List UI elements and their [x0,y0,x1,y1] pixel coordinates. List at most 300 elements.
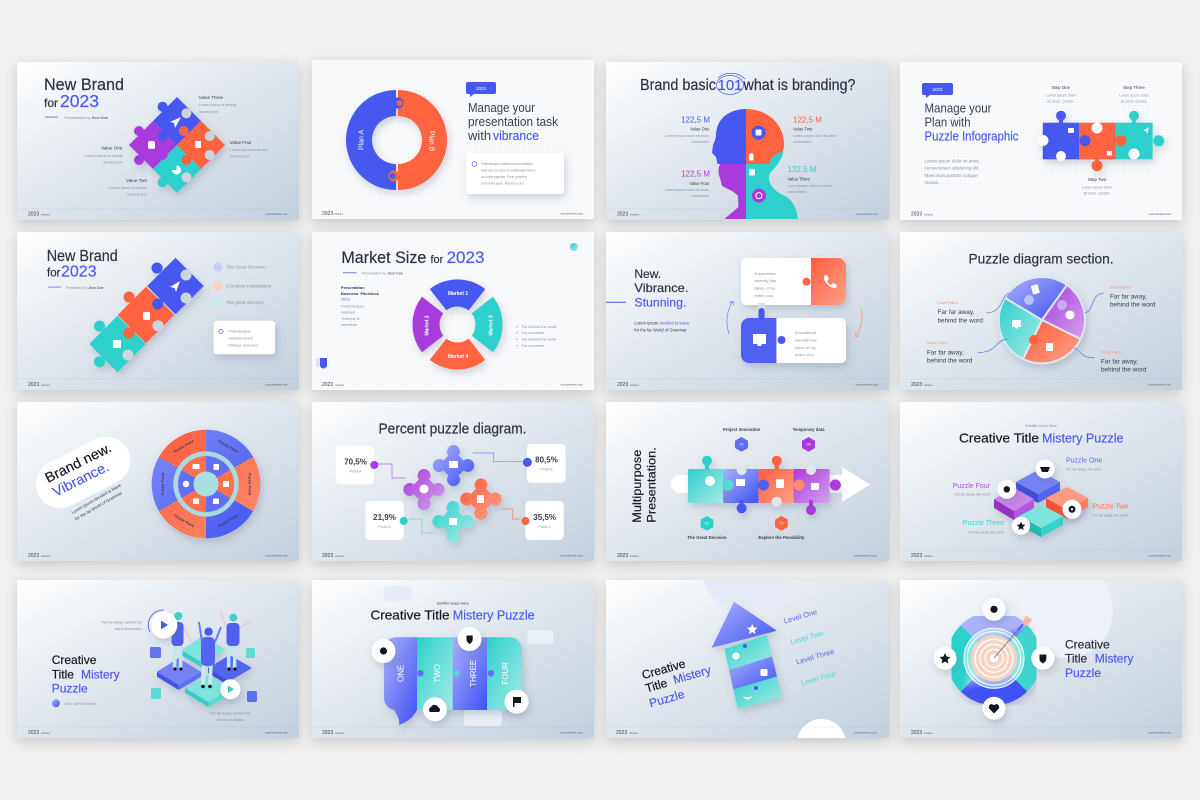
slide 12 puzzle labels: For far away, the word [1092,514,1128,518]
slide 11 vertical title: Presentation. [644,447,658,523]
slide 4 body text: Maecenas porttitor congue [924,173,978,178]
slide 6 market ring [426,293,489,356]
slide 16 dart [994,615,1032,658]
slide 6 left text: 2023 [341,296,350,302]
slide 1 value labels: Lorem Ipsum is simply [230,148,267,152]
slide 11 numbered hexagons [701,437,815,531]
slide 7: new vibrance stunning [606,232,889,390]
slide 6 market labels: Market 2 [424,315,430,336]
slide 7 heading [634,267,688,310]
slide 8 footer [900,379,1182,388]
slide 5 footer: 2023 [28,382,39,388]
slide 7 body text [634,320,690,332]
slide 6 footer [322,382,583,388]
slide 6 background [312,232,594,390]
slide 2 footer: yourwebsite.com [560,212,583,216]
slide 8 title: Puzzle diagram section. [968,250,1114,266]
slide 8 point labels: Puzzle Point D [1101,350,1123,354]
slide 10 footer: yourwebsite.com [560,554,583,558]
slide 13 start label: Let's Get's Started [64,702,95,706]
slide 5 text card [214,321,275,354]
slide 1: new brand diamond puzzle [17,62,299,220]
slide 7 bottom card text: taken of my [795,345,816,350]
slide 9 wheel labels: Puzzle Point [173,439,195,454]
slide 13 isometric platforms [157,636,252,707]
slide 16: target puzzle [900,564,1182,738]
slide 11 labels: Project Innovation [723,427,761,432]
slide 4 step labels [1046,85,1150,196]
slide 12 footer: vibrance [924,555,934,558]
slide 4 step labels: sit amet. Quisint. [1121,100,1147,104]
slide 12 footer: yourwebsite.com [1148,554,1171,558]
slide 2 text card: nonummy pede. Mauris et orci. [481,182,525,186]
slide 5 text card: habitant morbi [228,336,253,340]
slide 7 footer: vibrance [630,384,640,387]
slide 14 title: Mistery Puzzle [453,608,535,622]
slide 2 text card: Pellentesque habitant morbi tristique [481,162,533,166]
slide 2 plan labels: Plan A [358,130,366,150]
slide 2 heading [467,100,558,143]
slide 2 heading: vibrance [493,128,539,143]
slide 7 footer: yourwebsite.com [855,382,878,386]
slide 11: multipurpose arrow puzzle [606,402,889,561]
slide 14 speech bubble puzzle [384,637,522,725]
slide 5 title: New Brand [47,248,118,265]
slide 13 heading: Title [52,667,74,681]
slide 8 point labels: Puzzle Point C [927,341,949,345]
slide 4 step labels: Step Three [1123,85,1145,90]
slide 4 footer [911,212,1171,218]
slide 8 point labels: Far far away, [1110,294,1147,300]
slide 16 round icon badges [934,598,1054,720]
slide 4 body text: Lorem ipsum dolor sit amet, [924,158,980,164]
arrow: blue curved [727,301,734,334]
slide 3 footer: vibrance [630,214,640,216]
slide 12 puzzle labels: For far away, the word [969,530,1004,534]
slide 15 tilted arrow puzzle [712,602,782,709]
slide 12 title: Mistery Puzzle [1042,430,1124,446]
slide 16 footer [900,727,1182,736]
slide 14 section labels: FOUR [501,662,510,685]
slide 6 check list: For countries [522,330,544,335]
slide 3 footer: yourwebsite.com [855,212,878,216]
slide 9 wheel labels [161,439,251,529]
slide 14 section labels: ONE [396,665,406,682]
slide 9 wheel labels: Puzzle Point [218,439,240,454]
slide 10 title: Percent puzzle diagram. [378,422,526,438]
slide 13 top caption [102,620,142,631]
slide 12 puzzle labels: Puzzle Three [963,520,1004,527]
slide 6 left text: Presentation [341,285,365,290]
slide 12 puzzle labels: For far away, the word [1066,468,1101,472]
slide 13 heading: Puzzle [52,682,88,696]
slide 14 title [370,608,535,622]
slide 6 decorative blue shape [316,358,327,369]
slide 13 heading: Creative [52,653,97,667]
slide 6 title: Market Size [341,248,426,267]
slide 10 footer: 2023 [322,553,333,559]
slide 3 value labels: Value One [690,126,710,132]
slide 13 bottom caption: word mountains [217,718,244,722]
slide 11 labels [687,427,825,540]
slide 3 value labels: consectetur [788,190,807,194]
slide 4 footer: yourwebsite.com [1148,212,1171,216]
slide 14 round icon badges [372,627,529,721]
slide 10: percent puzzle diagram [312,402,594,561]
slide 5 presenter line [48,286,104,290]
slide 3 title: what is branding? [743,77,856,94]
slide 15 decorative circles [703,580,846,738]
slide 13 start label [52,699,95,707]
slide 14 section labels: THREE [469,660,478,687]
slide 1 title [44,75,124,111]
slide 7 top card text: taken of my [754,286,775,290]
slide 9 footer: yourwebsite.com [265,554,288,558]
slide 16 footer: yourwebsite.com [1148,730,1171,734]
slide 10 value text: 80,5% [535,456,558,464]
slide 8: puzzle diagram section [900,232,1182,390]
slide 4 step labels: Step One [1052,85,1071,90]
slide 3 value labels [665,116,837,198]
slide 6 left text [341,285,380,327]
slide 16 heading: Puzzle [1065,666,1101,680]
slide 14 footer: 2023 [322,730,333,736]
slide 6 presenter line: Presentation by Jhon Doe [362,272,403,276]
slide 2 plan labels [358,130,434,152]
slide 5 title: 2023 [61,264,97,281]
slide 11 background [606,402,889,561]
slide 9 wheel icons [183,464,229,504]
slide 10 blue puzzle piece [433,445,474,486]
slide 1 footer: vibrance [41,214,51,216]
slide 1 value labels: dummy text [103,160,123,164]
slide 15 rotated levels: Level Two [789,628,824,646]
slide 3 value labels: Lorem ipsum dolor sit amet, [665,188,710,192]
slide 6 footer: vibrance [335,384,345,387]
slide 7 bottom card text [795,330,817,357]
slide 12 subtitle: Subtitle Goes Here [1025,424,1057,428]
slide 10 background [312,402,594,561]
slide 10 teal puzzle piece [432,501,474,542]
slide 8 footer: 2023 [911,382,922,388]
slide 2: plan A and B circle [312,60,594,219]
slide 3 value labels: consectetur [691,194,710,198]
slide 8 background [900,232,1182,390]
slide 4 footer: 2023 [911,212,922,218]
slide 4 step labels: Lorem ipsum dolor [1082,186,1113,190]
slide 15 rotated levels: Level One [783,607,818,625]
slide 12 background [900,402,1182,561]
slide 5 footer [17,379,299,388]
slide 11 numbered hexagons: 02 [740,442,744,446]
slide 1 value labels: dummy text [230,154,250,158]
slide 6 market labels: Market 4 [448,354,468,360]
slide 2 background [312,60,594,219]
slide 12 round icon badges [997,460,1082,535]
slide 10 value text: Point C [538,525,551,529]
slide 6 presenter line [343,272,403,276]
slide 12 isometric orange block [1046,487,1088,519]
slide 14 section labels [396,660,510,687]
slide 1 value labels: Value Four [230,140,252,145]
slide 9: brand new vibrance wheel [17,402,299,561]
slide 13 footer: yourwebsite.com [265,730,288,734]
slide 15 rotated levels [783,607,837,687]
slide 13 footer: vibrance [41,732,51,735]
slide 13 heading: Mistery [81,667,120,681]
slide 13 person right [220,611,252,671]
slide 4 year tag [922,83,953,98]
slide 8 point labels: Puzzle Point B [1110,286,1131,290]
slide 5: diagonal three piece puzzle [17,232,299,390]
slide 7 heading: Vibrance. [634,281,688,295]
slide 6 check list: For countries [522,343,544,348]
slide 6 left text: Business. Pitchdeck [341,291,380,296]
slide 5 title: for [47,268,61,280]
slide 10 value text: 21,9% [373,513,396,522]
slide 15 footer: 2023 [616,730,627,736]
slide 6 left text: Habitant [341,310,356,314]
slide 5 text card: tristique senectus [228,344,258,348]
slide 2 heading: presentation task [468,114,558,129]
slide 5 checklist: The Great Decision [226,264,266,270]
slide 15 rotated heading: Puzzle [647,687,686,710]
slide 8 point labels: behind the word [927,358,973,364]
slide 8 point labels [927,286,1156,374]
slide 11 numbered hexagons: 04 [807,442,811,446]
slide 15: tilted arrow levels [601,579,894,747]
slide 14 subtitle: Subtitle Goes Here [437,602,469,606]
slide 6: market size ring [312,232,594,390]
slide 12 puzzle labels: For far away, the word [955,492,990,496]
slide 7 footer [606,379,889,388]
slide 7 heading: Stunning. [634,296,686,310]
slide 1 footer: 2023 [28,212,39,218]
slide 6 market labels: Market 3 [488,315,494,336]
slide 5 checklist: The great decision [226,300,264,305]
slide 11 labels: Explore the Possibility [758,535,805,540]
slide 3 title: Brand basic [640,77,716,94]
slide 6 check list [516,324,556,348]
slide 2 footer: 2023 [322,211,333,217]
slide 13 top caption: For far away, behind the [102,620,142,624]
slide 3 value labels: 122,5 M [681,170,710,178]
slide 4 step labels: Lorem ipsum dolor [1119,94,1150,98]
slide 10 value text: 70,5% [344,458,367,466]
slide 11 footer: vibrance [630,555,640,558]
slide 9 footer: 2023 [28,553,39,559]
slide 11 numbered hexagons: 03 [779,522,783,526]
slide 4 heading: Manage your [924,101,992,116]
slide 6 check list: For behind the word [522,324,556,329]
slide 4: horizontal puzzle infographic [900,62,1182,220]
slide 3 value labels: Lorem ipsum dolor sit amet, [665,134,710,138]
slide 3 footer: 2023 [617,212,628,218]
slide 13 person centre [199,622,221,688]
slide 1 value labels: dummy text [127,192,148,196]
slide 15 rotated levels: Level Three [795,647,836,666]
slide 2 heading: Manage your [468,100,536,115]
slide 9 footer [28,553,288,559]
slide 3 value labels: Value Four [689,181,710,186]
slide 1 title: 2023 [60,91,99,111]
slide 13 play badges [148,610,240,699]
slide 10 value text: 35,5% [533,513,556,522]
slide 10 value text: Point A [349,470,362,474]
slide 9 rotated body text: Lorem Ipsum decided to leave [71,482,122,515]
slide 10 purple puzzle piece [403,469,445,510]
slide 16 bullseye [964,628,1024,688]
slide 14 footer [312,727,594,736]
slide 1 footer [17,209,299,218]
slide 16 badge icons [940,606,1046,714]
slide 8 footer: yourwebsite.com [1148,382,1171,386]
slide 10 value text: Point D [378,525,391,529]
slide 14 faint chat bubbles [384,586,554,726]
slide 6 check list: ✓ [516,324,519,329]
slide 6 check list: ✓ [516,330,519,335]
slide 13 footer: 2023 [28,730,39,736]
slide 8 point labels: behind the word [1110,302,1156,309]
slide 16 target ring puzzle [971,635,1017,682]
slide 11 footer: 2023 [617,553,628,559]
slide 7 bottom card text: serenity has [795,338,817,342]
slide 1 value labels: Lorem Ipsum is simply [199,103,236,107]
slide 8 point labels: Far far away, [927,349,964,356]
arrow: orange curved [855,308,862,337]
slide 15 rotated heading [640,656,713,710]
slide 5 presenter line: Presented by Jhon Doe [66,286,104,290]
slide 5 background [17,232,299,390]
slide 4 body text: consectetuer adipiscing elit. [924,166,980,170]
slide 8 point labels: Far far away, [1101,358,1138,365]
slide 1 presenter line [45,116,108,120]
slide 2 year tag: 2023 [476,86,487,91]
slide 3 title: 101 [717,77,743,94]
slide 6 title: 2023 [447,248,484,267]
slide 9 rotated body text: for the far World of Grammar [74,490,123,521]
slide 2 text card [466,153,564,194]
slide 7 top card text: A wonderful [754,271,776,276]
slide 6 title: for [430,254,444,266]
slide 1 footer: yourwebsite.com [265,212,288,216]
slide 5 checklist [214,262,272,307]
slide 2 footer: vibrance [334,213,344,216]
slide 10 value text [344,456,558,529]
slide 3 head puzzle [712,109,798,219]
slide 7 connector [758,303,765,311]
slide 15 rotated heading: Creative [640,656,687,682]
slide 5 text card: Pellentesque [228,330,250,334]
slide 7 top card text [754,271,776,298]
slide 8 point labels: Puzzle Point A [938,301,959,305]
slide 10 value text: Point B [540,468,553,472]
slide 13: isometric people on puzzle [17,580,299,738]
slide 4 three piece puzzle [1038,111,1164,171]
slide 1 value labels: dummy text [199,110,219,114]
slide 8 point labels: Far far away, [938,309,975,316]
slide 3 value labels: Lorem ipsum dolor sit amet, [793,134,837,138]
slide 8 curved connectors [978,293,1104,358]
slide 4 step labels: sit amet. Quisint. [1084,192,1110,196]
slide 6 market labels: Market 1 [448,291,468,297]
slide 7 footer: 2023 [617,382,628,388]
slide 10 footer [322,553,583,559]
slide 11 vertical title [630,447,658,523]
slide 10 white value cards [336,444,566,540]
slide 8 point labels: behind the word [938,318,983,324]
slide 16 footer: vibrance [924,732,934,735]
slide 10 value dots [370,458,532,525]
slide 11 labels: Temporary data [793,427,825,432]
slide 12 footer [900,550,1182,559]
slide 1 value labels: Lorem Ipsum is simply [109,186,147,190]
slide 13 bottom caption: For far away, behind the [210,712,251,716]
slide 3 background [606,62,889,220]
slide 15 footer: vibrance [629,732,639,735]
slide 7 bottom card text: A wonderful [795,330,816,335]
slide 15 arrow icons [732,624,768,699]
slide 3 title [640,73,856,94]
slide 1 presenter line: Presentation by Jhon Doe [64,116,108,120]
slide 16 heading: Title [1065,652,1088,666]
slide 11 vertical title: Multipurpose [630,449,644,523]
slide 7 top card with phone icon [741,258,846,305]
slide 13 heading [52,653,120,696]
slide 16 heading: Mistery [1095,652,1133,666]
slide 12 isometric purple block [994,488,1034,520]
slide 3 value labels: consectetur [793,140,812,144]
slide 4 body text [924,158,980,185]
slide 12 puzzle labels [953,458,1128,534]
slide 6 footer: yourwebsite.com [560,382,583,386]
slide 15 footer: yourwebsite.com [854,730,877,734]
slide 9 wheel labels: Puzzle Point [173,514,195,529]
slide 3 value labels: Lorem ipsum dolor sit amet, [788,184,832,188]
slide 14 badge icons [380,636,521,712]
slide 9 footer: vibrance [41,555,51,558]
slide 6 left text: Tristique & [341,316,360,321]
slide 16 heading: Creative [1065,638,1110,652]
slide 7 body text: for the far World of Grammar [634,328,687,332]
slide 6 market labels [424,291,494,360]
slide 11 footer [617,553,877,559]
slide 10 connectors [377,453,522,533]
slide 1 title: New Brand [44,75,124,94]
slide 10 footer: vibrance [335,555,345,558]
slide 8 circular puzzle [999,277,1085,363]
slide 6 check list: For behind the word [522,336,556,342]
slide 12 title: Creative Title [959,430,1039,446]
slide 7 top card text: entire soul [754,293,773,298]
slide 3 value labels: 122,5 M [681,116,710,124]
slide 3: head puzzle [606,62,889,220]
slide 6 decorative teal dot [570,243,578,251]
slide 12: isometric puzzle [900,402,1182,561]
slide 4 year tag: 2023 [932,87,943,92]
slide 7 accent line [606,302,626,303]
slide 6 left text: senectus [341,322,357,327]
slide 7 bottom card text: entire soul [795,352,814,357]
slide 1 value labels: Value Two [126,178,147,183]
slide 12 footer: 2023 [911,553,922,559]
slide 12 title [959,430,1124,446]
slide 4 footer: vibrance [924,214,934,216]
slide 7 heading: New. [634,267,661,281]
slide 6 footer: 2023 [322,382,333,388]
slide 15 rotated heading: Mistery [671,663,713,687]
slide 7 body text: Lorem Ipsum decided to leave [634,320,690,326]
